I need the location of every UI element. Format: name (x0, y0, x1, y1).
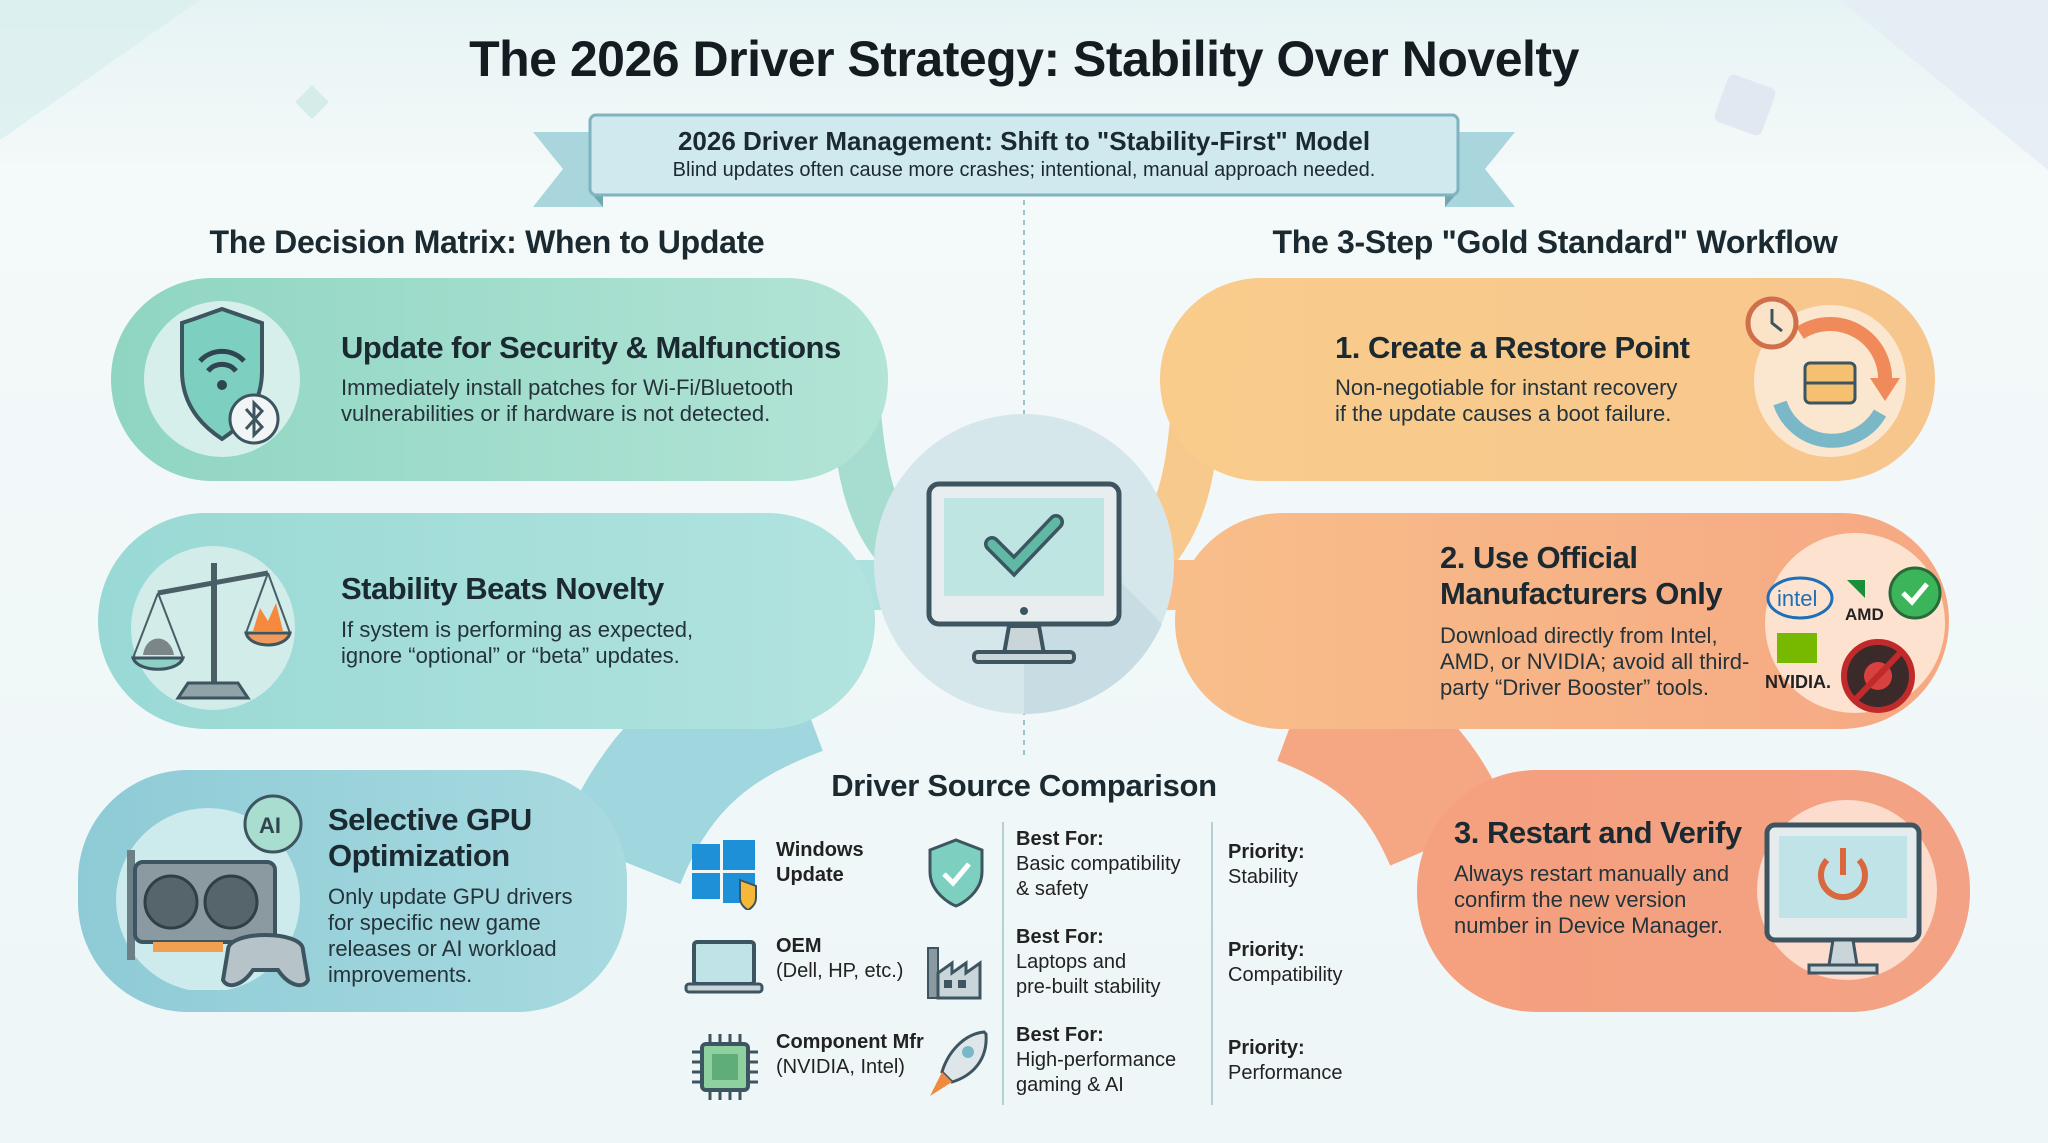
row: oem: Compatibility (1228, 964, 1342, 986)
panel: gpu: Only update GPU drivers (328, 884, 573, 909)
panel: gpu (116, 794, 573, 990)
row: oem: Laptops and (1016, 951, 1126, 973)
row: windows update: Update (776, 864, 844, 886)
icon: vendor logos: intel (1777, 586, 1817, 611)
panel: security: Update for Security & Malfunctions (341, 330, 841, 365)
panel: security (144, 301, 841, 457)
panel: official manufacturers: 2. Use Official (1440, 540, 1638, 575)
panel: gpu: improvements. (328, 962, 472, 987)
icon: vendor logos (1765, 533, 1945, 713)
panel: restart (1454, 800, 1937, 980)
row: windows update: Stability (1228, 866, 1298, 888)
row: windows update: Best For: (1016, 828, 1104, 850)
icon: monitor power (1757, 800, 1937, 980)
row: oem: pre-built stability (1016, 976, 1161, 998)
panel: gpu: Optimization (328, 838, 510, 873)
icon: shield wifi bluetooth (144, 301, 300, 457)
row: oem: Priority: (1228, 939, 1305, 961)
row: oem: (Dell, HP, etc.) (776, 960, 903, 982)
panel: gpu: releases or AI workload (328, 936, 557, 961)
panel: official manufacturers (1440, 533, 1945, 713)
panel: restore point: if the update causes a boot failure. (1335, 401, 1671, 426)
panel: stability (131, 546, 693, 710)
panel: restart: Always restart manually and (1454, 861, 1729, 886)
panel: restart: 3. Restart and Verify (1454, 815, 1742, 850)
row: component mfr: Priority: (1228, 1037, 1305, 1059)
left connectors (855, 400, 905, 555)
row: component mfr: Component Mfr (776, 1031, 924, 1053)
row: component mfr: Performance (1228, 1062, 1342, 1084)
row: oem: Best For: (1016, 926, 1104, 948)
row: oem: OEM (776, 935, 822, 957)
panel: official manufacturers: AMD, or NVIDIA; avoid all third- (1440, 649, 1749, 674)
panel: gpu: for specific new game (328, 910, 541, 935)
panel: security: vulnerabilities or if hardware is not detected. (341, 401, 770, 426)
row: oem (684, 926, 1342, 1000)
row: windows update: Windows (776, 839, 864, 861)
row: windows update: & safety (1016, 878, 1088, 900)
heading: workflow: The 3-Step "Gold Standard" Workflow (1272, 224, 1838, 260)
banner: 2026 Driver Management: Shift to "Stability-First" Model (678, 126, 1370, 156)
panel: restore point: Non-negotiable for instant recovery (1335, 375, 1677, 400)
row: component mfr (692, 1024, 1342, 1100)
panel: restart: number in Device Manager. (1454, 913, 1723, 938)
icon: restore (1746, 296, 1906, 457)
panel: restore point: 1. Create a Restore Point (1335, 330, 1689, 365)
panel: stability: Stability Beats Novelty (341, 571, 664, 606)
panel: official manufacturers: Manufacturers Only (1440, 576, 1722, 611)
panel: restore point (1335, 296, 1906, 457)
row: component mfr: (NVIDIA, Intel) (776, 1056, 905, 1078)
panel: official manufacturers: party “Driver Booster” tools. (1440, 675, 1709, 700)
row: windows update: Priority: (1228, 841, 1305, 863)
row: windows update (692, 828, 1305, 910)
panel: stability: ignore “optional” or “beta” updates. (341, 643, 680, 668)
row: component mfr: High-performance (1016, 1049, 1176, 1071)
center monitor icon (874, 414, 1174, 714)
icon: gpu and controller: AI (259, 813, 281, 838)
row: component mfr: Best For: (1016, 1024, 1104, 1046)
row: component mfr: gaming & AI (1016, 1074, 1124, 1096)
banner: Blind updates often cause more crashes; intentional, manual approach needed. (673, 159, 1375, 181)
panel: gpu: Selective GPU (328, 802, 532, 837)
banner (533, 114, 1515, 207)
title: The 2026 Driver Strategy: Stability Over Novelty (469, 31, 1579, 87)
panel: restart: confirm the new version (1454, 887, 1686, 912)
panel: official manufacturers: Download directly from Intel, (1440, 623, 1718, 648)
comparison table (684, 768, 1342, 1105)
icon: vendor logos: AMD (1845, 605, 1884, 624)
right connectors (1150, 420, 1195, 555)
row: windows update: Basic compatibility (1016, 853, 1181, 875)
heading: decision matrix: The Decision Matrix: When to Update (210, 224, 764, 260)
comparison heading: Driver Source Comparison (831, 768, 1217, 803)
panel: security: Immediately install patches for Wi-Fi/Bluetooth (341, 375, 793, 400)
dashed divider (1023, 200, 1025, 755)
icon: gpu and controller (116, 794, 310, 990)
icon: scales (131, 546, 295, 710)
icon: vendor logos: NVIDIA. (1765, 672, 1831, 692)
panel: stability: If system is performing as expected, (341, 617, 693, 642)
